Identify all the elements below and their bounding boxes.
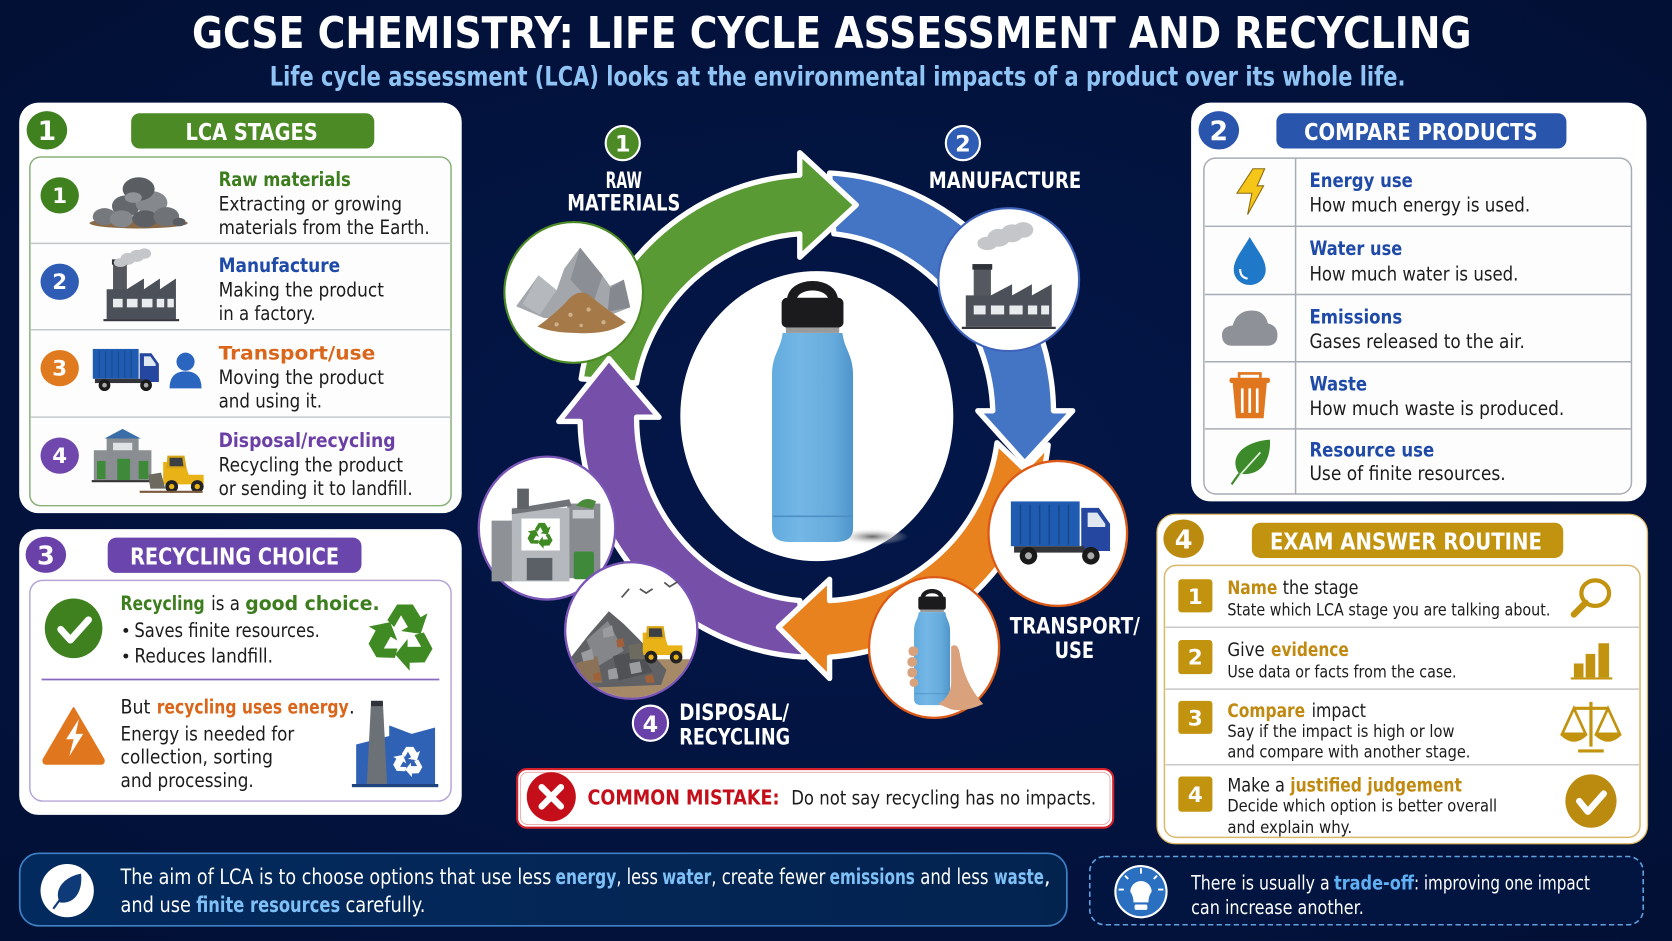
step 1: the stage: [1283, 578, 1359, 599]
label: disposal/recycling: 4: [643, 712, 658, 738]
stage 4 row: 4: [52, 444, 67, 469]
label: disposal/recycling: RECYCLING: [679, 725, 790, 751]
step 3: [1178, 701, 1621, 761]
callout: common mistake: Do not say recycling has no impacts.: [791, 786, 1096, 809]
callout: aim of LCA: finite resources: [196, 893, 340, 918]
stage 4 row: Recycling the product: [219, 454, 403, 477]
lifecycle arrows ring: [559, 153, 1073, 678]
callout: aim of LCA: The aim of LCA is to choose options that use less: [120, 865, 551, 890]
callout: aim of LCA: , less: [616, 865, 658, 890]
step 2: 2: [1188, 646, 1203, 671]
circle: transport: [988, 461, 1127, 606]
stage 1 row: Raw materials: [219, 168, 351, 191]
resource row: Resource use: [1309, 439, 1434, 462]
stage 1 row: materials from the Earth.: [219, 216, 430, 239]
callout: aim of LCA: and use: [120, 893, 191, 918]
arrow: disposal to raw materials: [559, 359, 804, 657]
label: transport/use: [1010, 614, 1141, 664]
step 4: Decide which option is better overall: [1227, 797, 1497, 816]
centre product circle: [680, 271, 953, 561]
label: transport/use: TRANSPORT/: [1010, 614, 1141, 640]
step 3: Say if the impact is high or low: [1227, 722, 1454, 741]
callout: aim of LCA: emissions: [830, 865, 915, 890]
badge 2: [1199, 111, 1239, 150]
good choice text: is a: [211, 592, 240, 615]
callout: common mistake: [517, 769, 1113, 828]
circle: recycling plant: [479, 457, 615, 600]
label: transport/use: USE: [1055, 638, 1094, 664]
resource row: Use of finite resources.: [1309, 462, 1506, 485]
panel: recycling choice: [19, 529, 462, 815]
stage 4 row: Disposal/recycling: [219, 429, 396, 452]
energy text: recycling uses energy: [157, 696, 349, 719]
callout: trade-off: can increase another.: [1191, 896, 1364, 919]
good choice text: Recycling: [120, 592, 205, 615]
energy text: [120, 696, 355, 792]
label: manufacture: MANUFACTURE: [929, 168, 1081, 194]
label: raw materials: [567, 126, 680, 216]
step 1: Name: [1227, 578, 1277, 599]
heading: recycling choice: RECYCLING CHOICE: [130, 542, 339, 570]
energy text: But: [120, 696, 151, 719]
heading: recycling choice: [108, 538, 361, 573]
step 4: 4: [1188, 783, 1203, 808]
heading: LCA stages: LCA STAGES: [186, 118, 318, 146]
badge 1: 1: [38, 116, 56, 147]
callout: aim of LCA: waste: [994, 865, 1044, 890]
badge 2: 2: [1210, 116, 1228, 147]
badge 3: 3: [37, 541, 55, 571]
circle: raw materials: [504, 222, 643, 363]
step 3: Compare: [1227, 701, 1305, 722]
step 1: [1178, 578, 1609, 620]
arrow: raw materials to manufacture: [581, 153, 856, 383]
label: raw materials: 1: [615, 132, 631, 158]
step 3: 3: [1188, 706, 1203, 731]
emissions row: [1222, 305, 1525, 353]
energy row: How much energy is used.: [1309, 193, 1530, 216]
stage 1 row: [41, 168, 430, 239]
energy text: collection, sorting: [120, 746, 273, 769]
energy text: and processing.: [120, 769, 254, 792]
stage 2 row: in a factory.: [219, 302, 316, 325]
stage 2 row: Making the product: [219, 279, 384, 302]
subtitle: Life cycle assessment (LCA) looks at the environmental impacts of a product over its whole life.: [270, 62, 1405, 93]
heading: exam answer routine: EXAM ANSWER ROUTINE: [1270, 527, 1542, 555]
energy row: [1237, 169, 1530, 216]
water row: How much water is used.: [1309, 263, 1518, 286]
callout: aim of LCA: energy: [556, 865, 616, 890]
energy text: Energy is needed for: [120, 722, 295, 745]
panel: exam answer routine: [1157, 514, 1647, 844]
callout: aim of LCA: ,: [1044, 865, 1051, 890]
stage 4 row: [41, 429, 413, 500]
step 4: justified judgement: [1289, 775, 1462, 796]
icon: warning: [44, 708, 104, 764]
heading: exam answer routine: [1252, 523, 1563, 558]
water row: Water use: [1309, 237, 1402, 260]
good choice text: [120, 592, 380, 667]
stage 3 row: 3: [52, 357, 67, 382]
choice box: [30, 580, 451, 801]
circle: manufacture: [938, 208, 1079, 351]
waste row: How much waste is produced.: [1309, 397, 1564, 420]
stage 2 row: Manufacture: [219, 254, 340, 277]
callout: trade-off: trade-off: [1334, 872, 1414, 895]
label: manufacture: 2: [955, 132, 971, 158]
step 1: State which LCA stage you are talking about.: [1227, 601, 1550, 620]
callout: trade-off: There is usually a: [1190, 872, 1330, 895]
stage 3 row: Moving the product: [219, 366, 384, 389]
circle: landfill: [563, 562, 702, 704]
waste row: [1229, 373, 1564, 420]
emissions row: Gases released to the air.: [1309, 330, 1525, 353]
stage 2 row: [41, 248, 384, 325]
water row: [1234, 237, 1518, 286]
callout: aim of LCA: [20, 853, 1067, 926]
emissions row: Emissions: [1309, 305, 1402, 328]
stage 4 row: or sending it to landfill.: [219, 477, 413, 500]
callout: common mistake: COMMON MISTAKE:: [588, 785, 779, 809]
badge 4: [1163, 520, 1204, 558]
compare table: [1204, 158, 1631, 494]
step 3: and compare with another stage.: [1227, 742, 1470, 761]
stage 1 row: 1: [52, 184, 67, 209]
label: raw materials: MATERIALS: [567, 190, 680, 216]
step 4: and explain why.: [1227, 818, 1352, 837]
callout: aim of LCA: and less: [920, 865, 988, 890]
bottle: [772, 281, 853, 542]
label: manufacture: [929, 126, 1081, 194]
callout: aim of LCA: carefully.: [345, 893, 425, 918]
badge 1: [27, 111, 67, 150]
heading: LCA stages: [131, 113, 374, 148]
step 4: [1178, 774, 1617, 837]
step 2: Give: [1227, 640, 1265, 661]
label: raw materials: RAW: [606, 168, 642, 194]
step 3: impact: [1312, 701, 1366, 722]
stages table: [30, 157, 451, 506]
stage 3 row: Transport/use: [219, 344, 375, 365]
label: disposal/recycling: [633, 700, 790, 751]
stage 1 row: Extracting or growing: [219, 192, 402, 215]
good choice text: Saves finite resources.: [134, 619, 320, 642]
panel: compare products: [1191, 103, 1646, 501]
badge 4: 4: [1175, 525, 1193, 555]
energy text: .: [349, 696, 355, 719]
good choice text: Reduces landfill.: [134, 644, 273, 667]
badge 3: [26, 537, 66, 573]
step 1: 1: [1188, 585, 1203, 610]
step 2: [1178, 640, 1612, 681]
callout: aim of LCA: , create fewer: [711, 865, 826, 890]
heading: compare products: [1276, 113, 1566, 148]
callout: aim of LCA: water: [662, 865, 712, 890]
icon: recycling plant: [352, 701, 438, 787]
callout: trade-off: : improving one impact: [1414, 872, 1590, 895]
label: disposal/recycling: DISPOSAL/: [679, 700, 790, 726]
stage 3 row: [41, 344, 384, 413]
step 4: Make a: [1227, 775, 1285, 796]
waste row: Waste: [1309, 373, 1367, 396]
icon: check: [45, 598, 102, 658]
good choice text: good choice.: [245, 592, 380, 615]
arrow: transport to disposal: [778, 443, 1048, 678]
stage 3 row: and using it.: [219, 390, 322, 413]
resource row: [1232, 439, 1506, 485]
arrow: manufacture to transport: [830, 173, 1073, 463]
stage 2 row: 2: [52, 270, 67, 295]
callout: trade-off: [1090, 857, 1643, 925]
energy row: Energy use: [1309, 169, 1413, 192]
circle: use: [869, 577, 999, 718]
title: GCSE CHEMISTRY: LIFE CYCLE ASSESSMENT AND RECYCLING: [192, 8, 1472, 59]
step 2: Use data or facts from the case.: [1227, 662, 1457, 681]
step 2: evidence: [1271, 640, 1349, 661]
panel: LCA stages: [19, 103, 462, 513]
heading: compare products: COMPARE PRODUCTS: [1304, 118, 1538, 146]
routine table: [1164, 565, 1640, 837]
icon: recycle arrows: [361, 604, 437, 675]
